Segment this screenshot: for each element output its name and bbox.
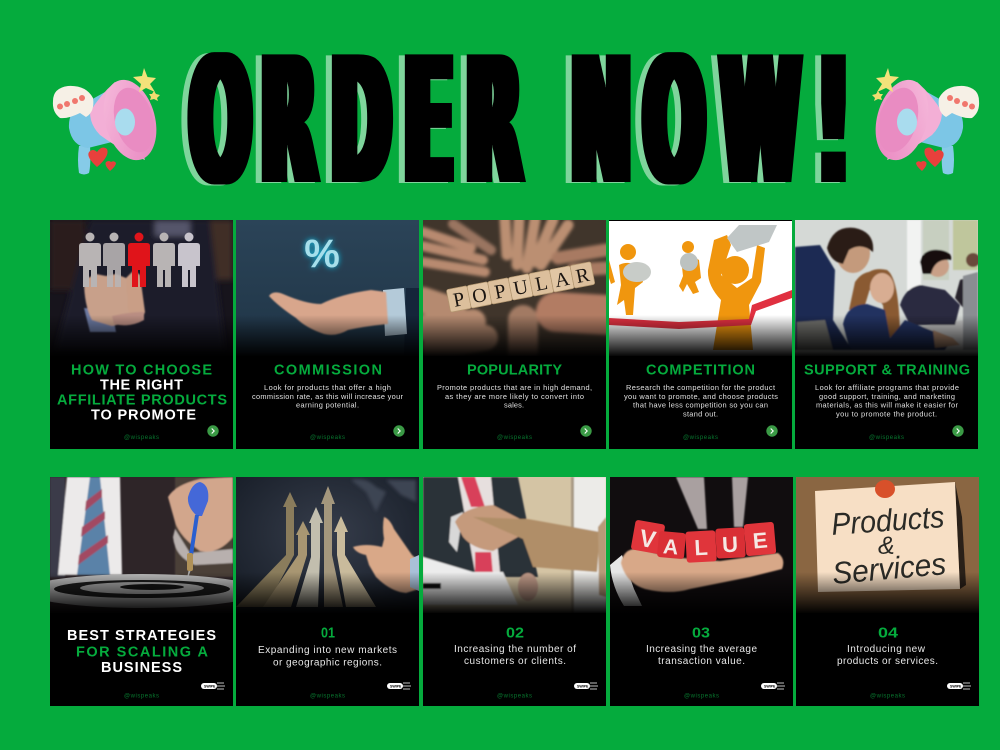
heading xyxy=(67,628,216,676)
photo: open hand with percent sign xyxy=(236,220,419,360)
body text: good support, training, and marketing xyxy=(819,392,955,401)
photo: dart hitting target xyxy=(24,477,260,617)
panel: strategy 01 xyxy=(236,477,419,706)
panel: best strategies xyxy=(50,477,233,706)
icon: next arrow xyxy=(952,425,964,437)
icon: swipe xyxy=(761,683,785,689)
photo: open hand with percent sign: % xyxy=(304,232,340,276)
body text: sales. xyxy=(504,401,524,410)
blocks: VALUE: U xyxy=(721,532,739,557)
icon: swipe: SWIPE xyxy=(577,684,589,688)
panel: competition xyxy=(609,220,792,449)
panel: strategy 02 xyxy=(423,477,606,706)
body text: you want to promote, and choose products xyxy=(624,392,778,401)
handle: @wispeaks xyxy=(124,435,159,441)
photo: orange figures at finish line xyxy=(609,221,792,360)
body text: Look for affiliate programs that provide xyxy=(815,383,959,392)
icon: next arrow xyxy=(393,425,405,437)
number: 02 xyxy=(506,626,524,642)
heading: FOR SCALING A xyxy=(76,644,209,660)
icon: swipe: SWIPE xyxy=(950,684,962,688)
panel: commission xyxy=(236,220,419,449)
body text: that have less competition so you can xyxy=(633,401,768,410)
photo: open hand with percent sign: % xyxy=(304,232,340,276)
body text: Promote products that are in high demand, xyxy=(437,383,592,392)
icon: megaphone left xyxy=(53,68,165,174)
icon: swipe: SWIPE xyxy=(204,684,216,688)
body text xyxy=(837,644,938,667)
icon: next arrow xyxy=(207,425,219,437)
body text: you to promote the product. xyxy=(836,410,937,418)
photo: note pinned to cork board: Services xyxy=(831,546,947,591)
blocks: VALUE: A xyxy=(662,535,679,560)
handle: @wispeaks xyxy=(310,694,345,700)
handle: @wispeaks xyxy=(683,435,718,441)
blocks: VALUE: L xyxy=(694,535,708,560)
body text xyxy=(252,383,404,410)
heading: POPULARITY xyxy=(467,363,562,379)
panel: how to choose xyxy=(50,220,233,449)
body text xyxy=(815,383,959,418)
handle: @wispeaks xyxy=(869,435,904,441)
body text: Increasing the average xyxy=(646,644,757,655)
heading: HOW TO CHOOSE xyxy=(71,363,212,379)
heading: THE RIGHT xyxy=(100,377,183,393)
heading: COMMISSION xyxy=(274,363,382,379)
photo: hands around POPULAR blocks xyxy=(423,220,606,360)
blocks: VALUE: E xyxy=(752,527,769,554)
photo: call centre team xyxy=(795,220,980,360)
heading xyxy=(57,363,227,424)
panel: popularity xyxy=(423,220,606,449)
body text xyxy=(437,383,592,410)
heading: COMPETITION xyxy=(646,363,755,379)
body text: as they are more likely to convert into xyxy=(445,392,584,401)
number: 04 xyxy=(878,626,898,642)
body text xyxy=(624,383,778,418)
photo: note pinned to cork board: Products xyxy=(830,499,945,542)
body text: Introducing new xyxy=(847,644,926,655)
handle: @wispeaks xyxy=(870,694,905,700)
photo: VALUE blocks on hand xyxy=(610,477,793,617)
body text: Research the competition for the product xyxy=(626,383,775,392)
handle: @wispeaks xyxy=(497,694,532,700)
body text: Look for products that offer a high xyxy=(264,383,391,392)
heading: SUPPORT & TRAINING xyxy=(804,363,970,379)
panel: strategy 03 xyxy=(610,477,793,706)
number: 03 xyxy=(692,626,710,642)
handle: @wispeaks xyxy=(310,435,345,441)
handle: @wispeaks xyxy=(124,694,159,700)
icon: next arrow xyxy=(580,425,592,437)
panel: strategy 04 xyxy=(796,477,979,706)
panel: support and training xyxy=(795,220,978,449)
body text: customers or clients. xyxy=(464,656,566,667)
photo: note pinned to cork board: & xyxy=(878,532,895,560)
heading: AFFILIATE PRODUCTS xyxy=(57,393,227,409)
icon: swipe xyxy=(574,683,598,689)
body text: earning potential. xyxy=(296,401,359,410)
body text: stand out. xyxy=(683,410,718,418)
body text: or geographic regions. xyxy=(273,657,382,668)
body text: Expanding into new markets xyxy=(258,645,397,656)
body text: transaction value. xyxy=(658,656,745,667)
title: ORDER NOW!: ORDER NOW! xyxy=(190,20,850,224)
icon: next arrow xyxy=(766,425,778,437)
title: ORDER NOW!: ORDER NOW! xyxy=(184,21,844,225)
body text xyxy=(646,644,757,667)
body text: products or services. xyxy=(837,656,938,667)
blocks: POPULAR: POPULAR xyxy=(451,264,592,312)
blocks: VALUE: V xyxy=(637,525,658,554)
icon: swipe: SWIPE xyxy=(390,684,402,688)
heading: TO PROMOTE xyxy=(91,408,196,424)
photo: rising arrows and pointing hand xyxy=(236,477,419,617)
handle: @wispeaks xyxy=(497,435,532,441)
number: 01 xyxy=(321,626,335,642)
blocks: VALUE xyxy=(630,520,776,563)
photo: pointing hand and people icons xyxy=(50,220,233,360)
icon: megaphone right xyxy=(867,68,979,174)
icon: swipe xyxy=(201,683,225,689)
heading: BUSINESS xyxy=(101,660,182,676)
photo: handshake xyxy=(423,477,606,617)
icon: swipe: SWIPE xyxy=(764,684,776,688)
icon: swipe xyxy=(947,683,971,689)
heading: BEST STRATEGIES xyxy=(67,628,216,644)
body text xyxy=(454,644,576,667)
body text xyxy=(258,645,397,668)
photo: note pinned to cork board xyxy=(796,477,979,617)
body text: commission rate, as this will increase your xyxy=(252,392,404,401)
icon: swipe xyxy=(387,683,411,689)
body text: Increasing the number of xyxy=(454,644,576,655)
body text: materials, as this will make it easier for xyxy=(816,401,959,410)
handle: @wispeaks xyxy=(684,694,719,700)
